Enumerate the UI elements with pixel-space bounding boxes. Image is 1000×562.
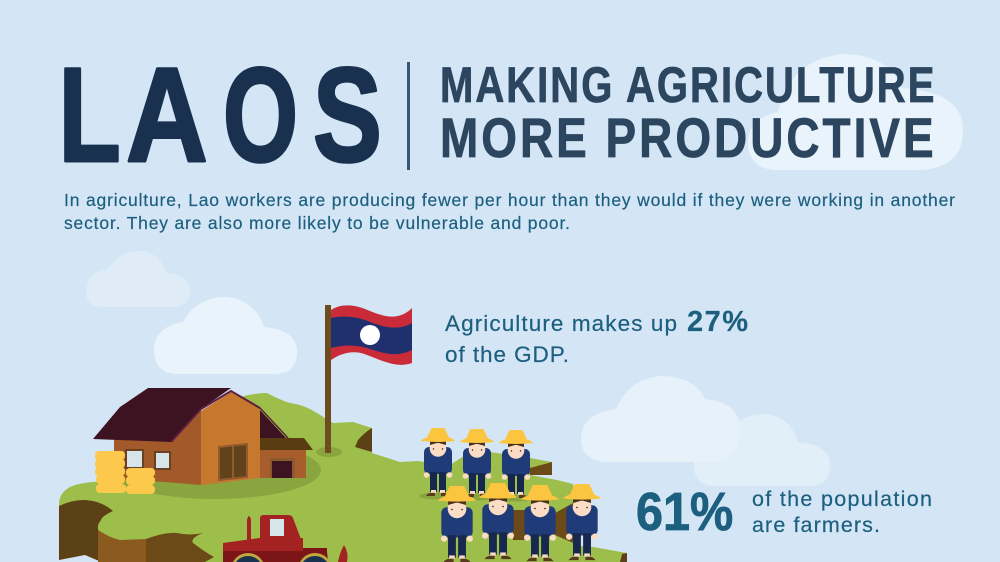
door xyxy=(219,444,247,480)
brown cliff left xyxy=(59,500,113,561)
stat: farmers: of the population xyxy=(752,487,932,511)
subtitle: MORE PRODUCTIVE xyxy=(440,107,934,169)
side wing xyxy=(260,448,306,478)
stat: GDP: of the GDP. xyxy=(445,342,569,367)
tractor xyxy=(223,515,348,562)
house xyxy=(93,388,313,485)
farmers front row xyxy=(438,483,601,562)
roof xyxy=(93,388,231,442)
stat: farmers: 61% xyxy=(636,481,733,542)
flag red band xyxy=(331,305,412,365)
stat: farmers xyxy=(636,481,932,542)
intro paragraph xyxy=(64,190,955,233)
title: LAOS: L xyxy=(58,41,121,190)
flag blue band xyxy=(331,317,412,354)
farmers back row xyxy=(419,428,535,502)
title: LAOS xyxy=(58,39,382,190)
stat: GDP: Agriculture makes up xyxy=(445,311,677,336)
windows xyxy=(126,450,143,468)
intro paragraph: In agriculture, Lao workers are producing fewer per hour than they would if they were working in another xyxy=(64,190,955,210)
stat: GDP: 27% xyxy=(687,306,748,338)
cab xyxy=(260,515,302,542)
hillside xyxy=(59,393,627,562)
stat: GDP xyxy=(445,306,748,367)
hay bales xyxy=(95,451,155,494)
subtitle: MAKING AGRICULTURE xyxy=(440,57,934,113)
cloud: behind title xyxy=(748,54,963,170)
cloud: small upper left xyxy=(86,251,190,307)
title: LAOS: O xyxy=(223,39,298,190)
plough xyxy=(338,545,348,562)
green land xyxy=(59,393,627,562)
brown cliff upper right xyxy=(355,428,372,452)
wheels xyxy=(231,553,265,562)
brown cliff centre xyxy=(98,530,146,562)
brown cliff right xyxy=(530,462,552,475)
title divider xyxy=(407,62,410,170)
cloud: right small xyxy=(694,414,830,486)
cab window xyxy=(270,519,284,536)
subtitle xyxy=(440,57,934,169)
body xyxy=(223,538,303,552)
intro paragraph: sector. They are also more likely to be vulnerable and poor. xyxy=(64,213,570,233)
exhaust xyxy=(247,516,251,540)
title: LAOS: A xyxy=(126,41,208,190)
house shadow xyxy=(109,441,321,499)
flag circle xyxy=(360,325,380,345)
cloud: left of flag xyxy=(154,297,297,374)
walls xyxy=(114,408,201,485)
stat: farmers: are farmers. xyxy=(752,513,880,537)
title: LAOS: S xyxy=(313,41,382,190)
cloud: right large xyxy=(581,376,740,462)
flag pole xyxy=(316,447,342,457)
flag xyxy=(316,305,412,457)
